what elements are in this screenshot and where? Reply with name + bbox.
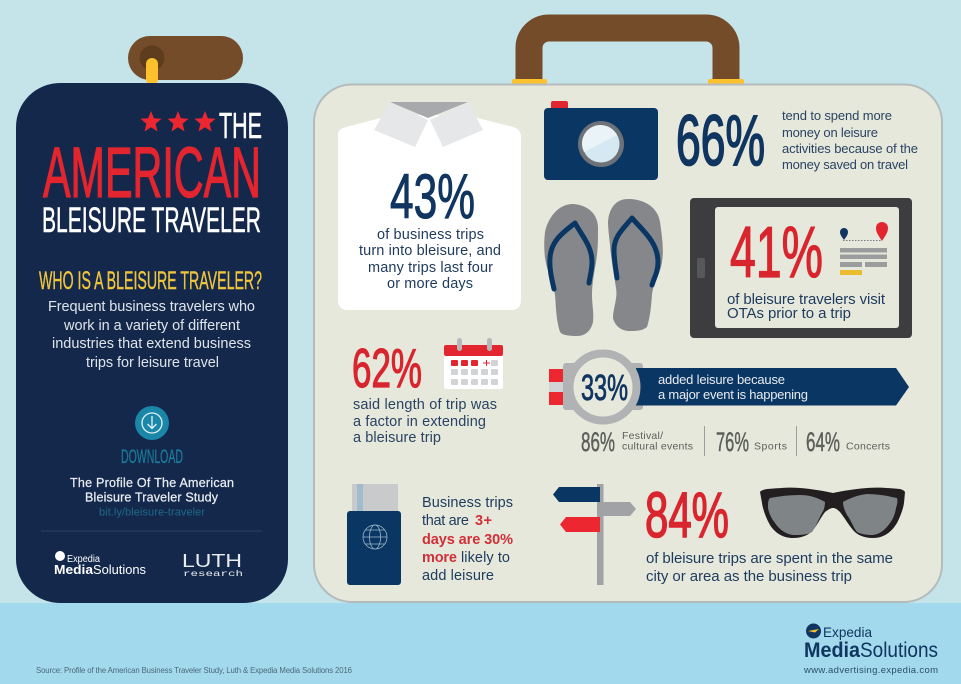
stat: 66%: [676, 102, 918, 181]
text: 33% description: [658, 372, 808, 402]
stat row: event types: [581, 426, 890, 457]
text: 41% description: of bleisure travelers visit: [727, 291, 886, 308]
icon: calendar: [444, 338, 503, 389]
text: 84% description: city or area as the business trip: [646, 568, 852, 585]
icon: route map: [840, 222, 888, 275]
panel: shirt stat 43%: [338, 102, 521, 310]
title: THE: [219, 105, 262, 146]
text block: definition: Frequent business travelers who: [48, 299, 255, 315]
logo: Expedia Media Solutions: Expedia: [67, 554, 100, 565]
logo: Luth Research: LUTH: [182, 551, 242, 571]
text: business trips stat: that are: [422, 513, 469, 529]
logo: Expedia Media Solutions footer: Expedia: [823, 624, 872, 640]
link: study url: bit.ly/bleisure-traveler: [99, 506, 205, 518]
stat row: event types: Concerts: [846, 440, 890, 452]
stat: 62%: [352, 337, 497, 446]
stat row: event types: Sports: [754, 440, 787, 452]
panel: luggage tag: [16, 83, 288, 603]
text: 33% description: a major event is happening: [658, 387, 808, 402]
icon: signpost: [553, 484, 636, 585]
panel: tablet stat 41%: [690, 198, 912, 338]
text block: definition: trips for leisure travel: [86, 355, 219, 371]
text: 66% description: tend to spend more: [782, 108, 892, 123]
stat row: event types: 86%: [581, 427, 615, 457]
text: business trips stat: add leisure: [422, 568, 494, 584]
icon: camera: [544, 101, 658, 180]
text: 62% description: a factor in extending: [353, 414, 486, 430]
logo: Luth Research: research: [183, 569, 243, 579]
text: 43% description: or more days: [387, 276, 473, 292]
text: 66% description: [782, 108, 918, 172]
logo: Expedia Media Solutions: Media: [54, 562, 94, 577]
panel: shirt stat 43%: 43%: [390, 162, 475, 232]
icon: download: [135, 406, 169, 440]
text: 43% description: turn into bleisure, and: [359, 243, 501, 259]
title: [42, 105, 262, 240]
text: 43% description: of business trips: [377, 227, 484, 243]
text block: study title: [70, 476, 234, 504]
logo: Luth Research: [182, 551, 243, 579]
text: 66% description: money on leisure: [782, 125, 878, 140]
text block: study title: Bleisure Traveler Study: [85, 490, 219, 504]
text: source: Source: Profile of the American Business Traveler Study, Luth & Expedia Media Solutions 2016: [36, 666, 352, 675]
icon: three stars: [140, 111, 216, 132]
text: 84% description: [646, 550, 893, 585]
logo: Expedia Media Solutions footer: Solutions: [860, 639, 938, 662]
text: 84% description: of bleisure trips are spent in the same: [646, 550, 893, 567]
logo: Expedia Media Solutions: Solutions: [93, 562, 146, 577]
stat row: event types: Festival/: [622, 430, 663, 442]
stat: 84%: [645, 479, 893, 585]
suitcase handle: [512, 28, 744, 85]
chart: watch stat 33%: [549, 354, 909, 420]
icon: passport: [347, 484, 401, 585]
panel: suitcase: [314, 84, 942, 602]
logo: Expedia Media Solutions: [54, 551, 146, 577]
text: 43% description: [359, 227, 501, 292]
icon: flip-flops: [544, 199, 663, 336]
text: 41% description: OTAs prior to a trip: [727, 305, 851, 322]
logo: Expedia Media Solutions footer: [803, 624, 938, 676]
stat row: event types: cultural events: [622, 440, 693, 452]
text: 43% description: many trips last four: [368, 260, 493, 276]
stat: 66%: 66%: [676, 102, 765, 181]
logo: Expedia Media Solutions footer: Media: [804, 639, 860, 662]
stat row: event types: 64%: [806, 427, 840, 457]
text block: definition: work in a variety of different: [63, 318, 240, 334]
text: business trips stat: 3+: [475, 513, 492, 529]
text: business trips stat: [422, 495, 513, 584]
heading: who is a bleisure traveler: WHO IS A BLEISURE TRAVELER?: [39, 267, 262, 295]
title: AMERICAN: [43, 134, 261, 213]
text: 33% description: added leisure because: [658, 372, 785, 387]
stat: 84%: 84%: [645, 479, 729, 551]
text: business trips stat: likely to: [461, 550, 510, 566]
chart: watch stat 33%: 33%: [581, 367, 628, 408]
luggage tag handle: [128, 36, 243, 85]
text: business trips stat: days are 30%: [422, 532, 513, 548]
panel: tablet stat 41%: 41%: [730, 213, 823, 293]
text: 62% description: [353, 397, 497, 446]
text: business trips stat: more: [422, 550, 457, 566]
icon: sunglasses: [760, 488, 905, 538]
text block: study title: The Profile Of The American: [70, 476, 234, 490]
text block: definition: [48, 299, 255, 371]
stat row: event types: 76%: [716, 427, 749, 457]
link: website: www.advertising.expedia.com: [803, 665, 938, 676]
text block: definition: industries that extend business: [52, 336, 251, 352]
title: BLEISURE TRAVELER: [42, 201, 261, 240]
text: 66% description: money saved on travel: [782, 157, 908, 172]
text: 66% description: activities because of the: [782, 141, 918, 156]
text: 62% description: a bleisure trip: [353, 430, 441, 446]
text: business trips stat: Business trips: [422, 495, 513, 511]
text: 41% description: [727, 291, 886, 322]
label: download: DOWNLOAD: [121, 447, 183, 468]
stat: 62%: 62%: [352, 337, 422, 399]
text: 62% description: said length of trip was: [353, 397, 497, 413]
